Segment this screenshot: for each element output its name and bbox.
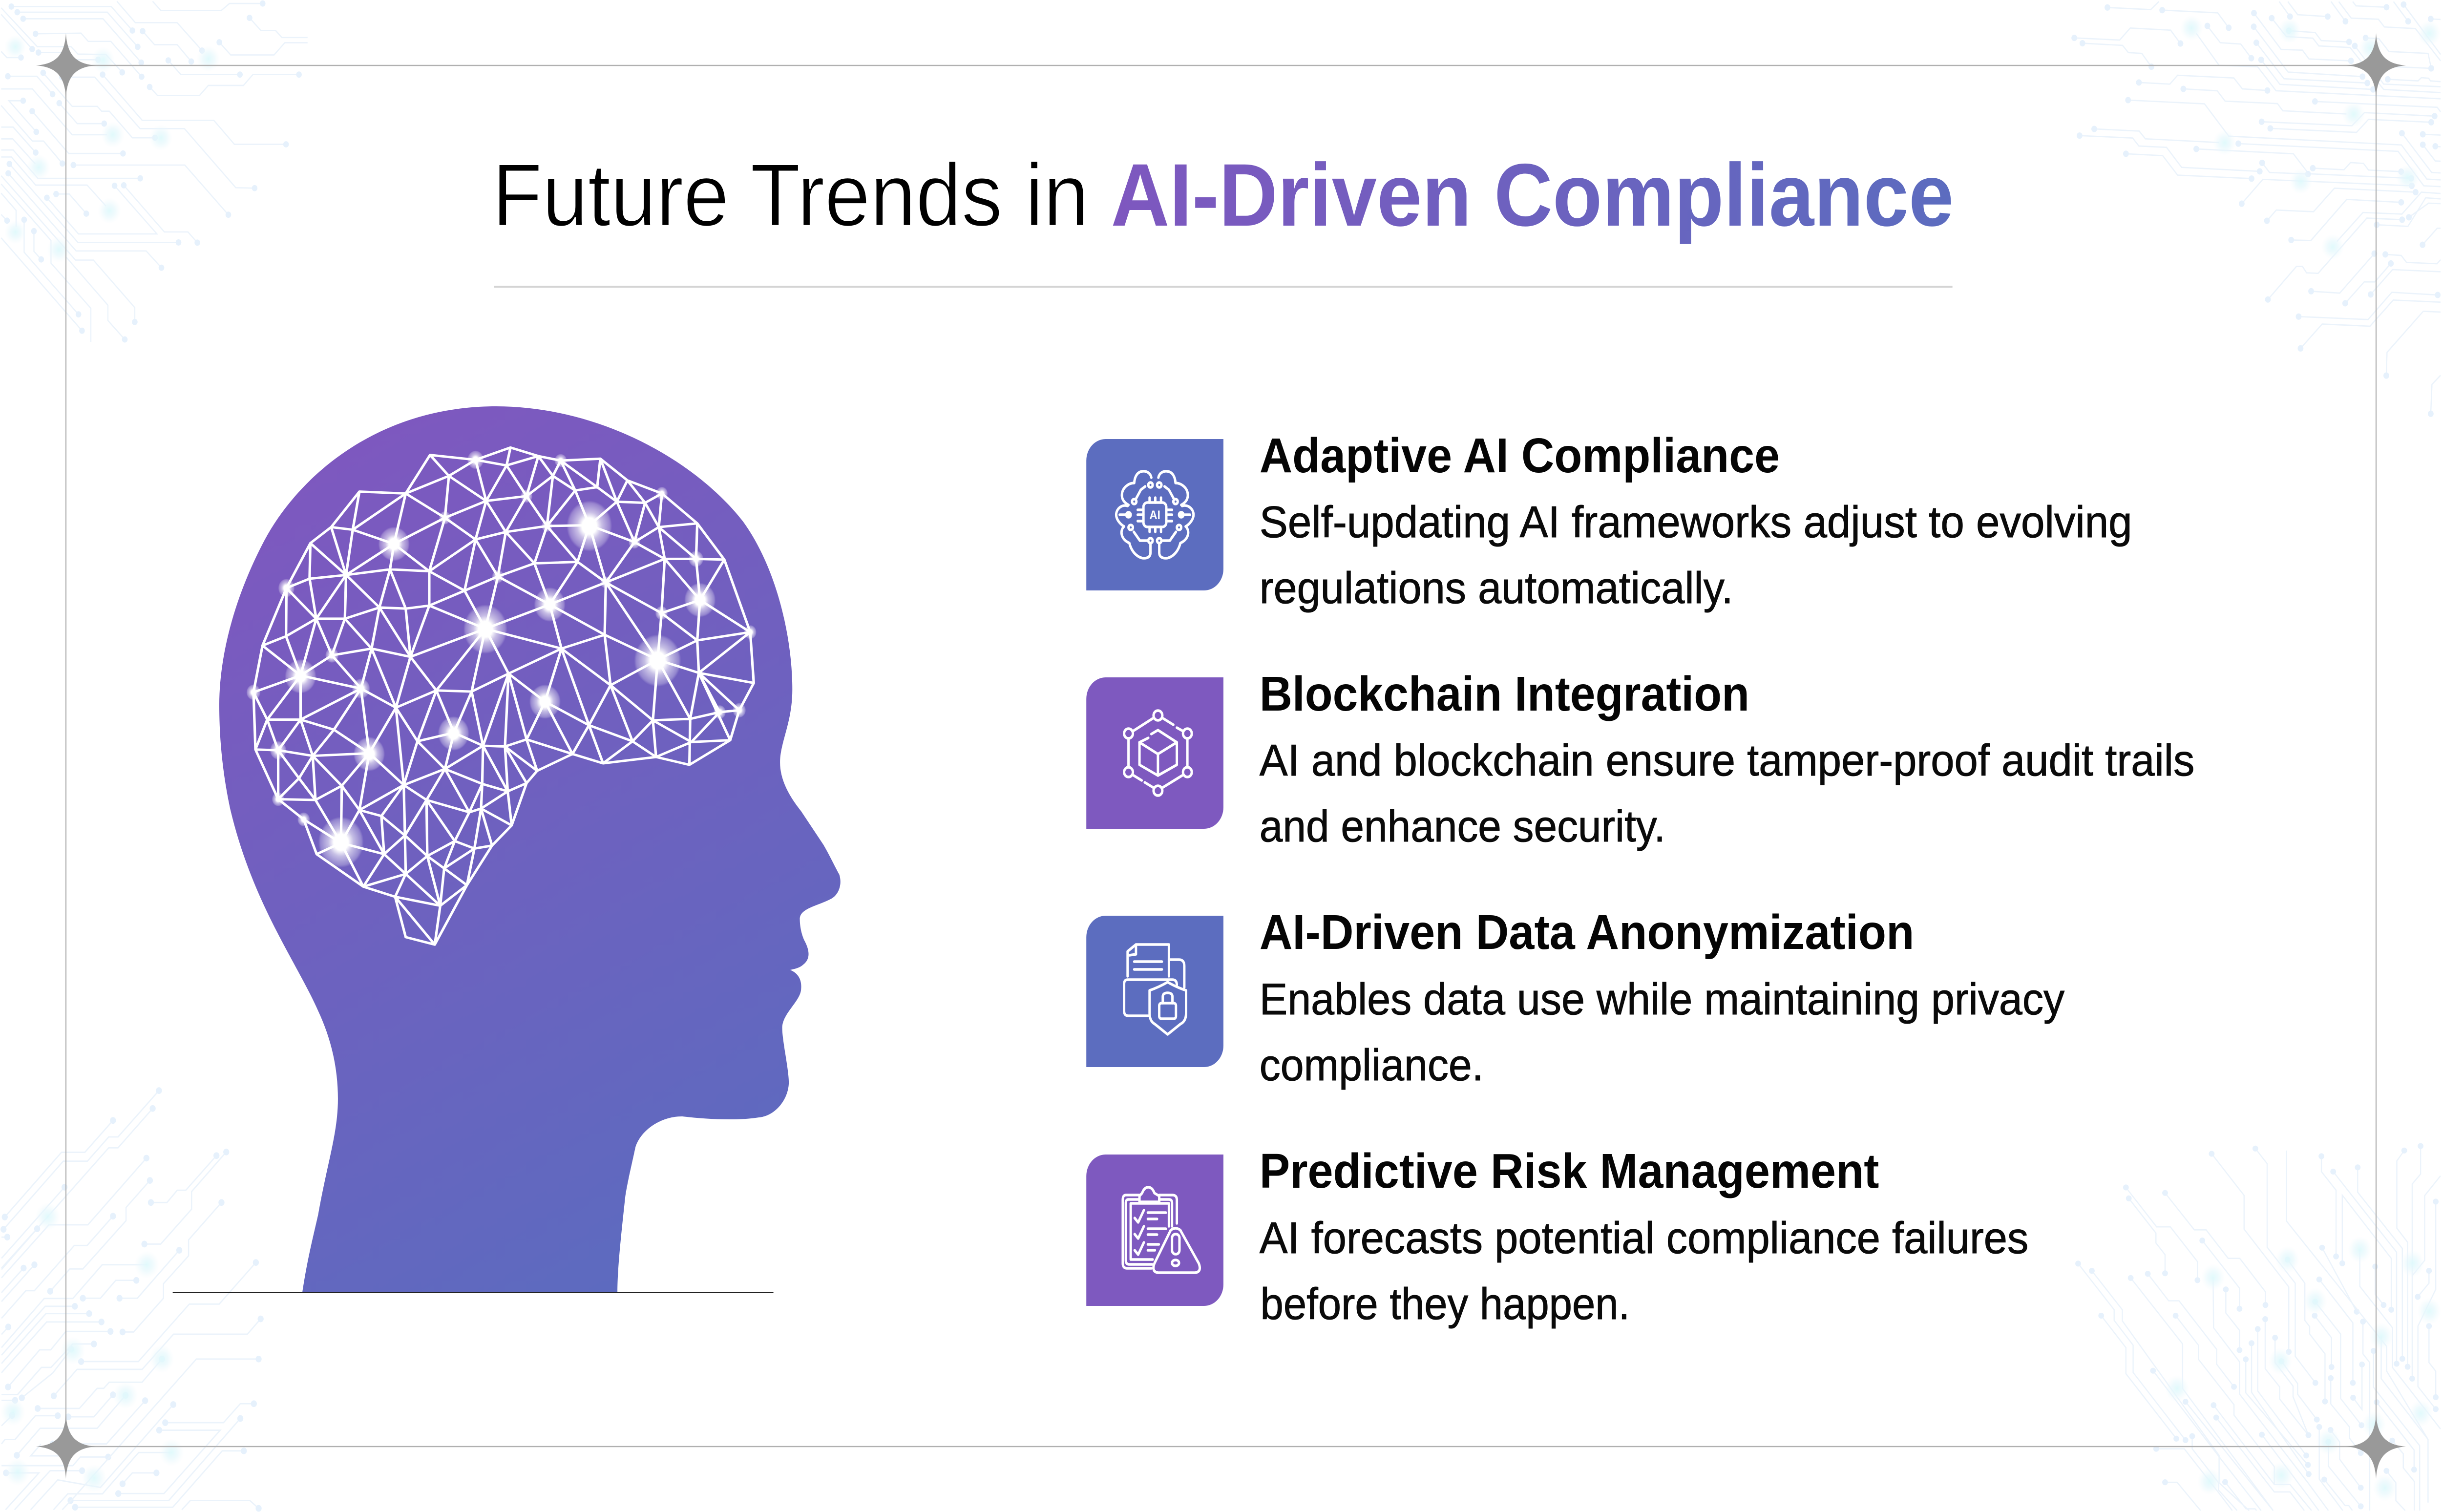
description bbox=[1260, 975, 2065, 1090]
glowing nodes bbox=[247, 450, 757, 868]
ground line bbox=[173, 1292, 774, 1293]
title bbox=[492, 145, 1954, 245]
description: regulations automatically. bbox=[1260, 564, 1733, 613]
background circuit: top-right corner bbox=[2074, 1, 2441, 414]
description bbox=[1260, 736, 2194, 851]
item 1: Adaptive AI Compliance bbox=[1086, 429, 2132, 613]
icon card: blockchain cube bbox=[1086, 677, 1223, 829]
icon card: AI brain bbox=[1086, 439, 1223, 590]
heading: Blockchain Integration bbox=[1260, 667, 1749, 721]
heading: Adaptive AI Compliance bbox=[1260, 429, 1780, 483]
head silhouette bbox=[219, 406, 841, 1292]
background circuit: bottom-right corner bbox=[2078, 1146, 2441, 1511]
item 2: Blockchain Integration bbox=[1086, 667, 2194, 851]
description: compliance. bbox=[1260, 1041, 1484, 1090]
title divider bbox=[494, 286, 1953, 288]
title: Future Trends in bbox=[492, 145, 1089, 245]
item 4: Predictive Risk Management bbox=[1086, 1144, 2028, 1329]
brain mesh network bbox=[247, 447, 757, 945]
description: AI forecasts potential compliance failures bbox=[1260, 1214, 2028, 1263]
head illustration bbox=[173, 406, 841, 1293]
background circuit: bottom-left corner bbox=[0, 1091, 261, 1510]
description: AI and blockchain ensure tamper-proof audit trails bbox=[1260, 736, 2194, 785]
description bbox=[1260, 1214, 2028, 1329]
description: Self-updating AI frameworks adjust to evolving bbox=[1260, 498, 2132, 547]
heading: Predictive Risk Management bbox=[1260, 1144, 1879, 1198]
description: Enables data use while maintaining privacy bbox=[1260, 975, 2065, 1024]
icon card: checklist with warning bbox=[1086, 1155, 1223, 1306]
title: AI-Driven Compliance bbox=[1111, 145, 1954, 245]
description: before they happen. bbox=[1261, 1280, 1630, 1329]
heading: AI-Driven Data Anonymization bbox=[1260, 905, 1914, 960]
icon card: secure documents bbox=[1086, 916, 1223, 1067]
icon card: AI brain: AI bbox=[1149, 508, 1160, 522]
background circuit: top-left corner bbox=[1, 1, 308, 342]
item 3: AI-Driven Data Anonymization bbox=[1086, 905, 2065, 1090]
description: and enhance security. bbox=[1260, 802, 1665, 851]
description bbox=[1260, 498, 2132, 613]
